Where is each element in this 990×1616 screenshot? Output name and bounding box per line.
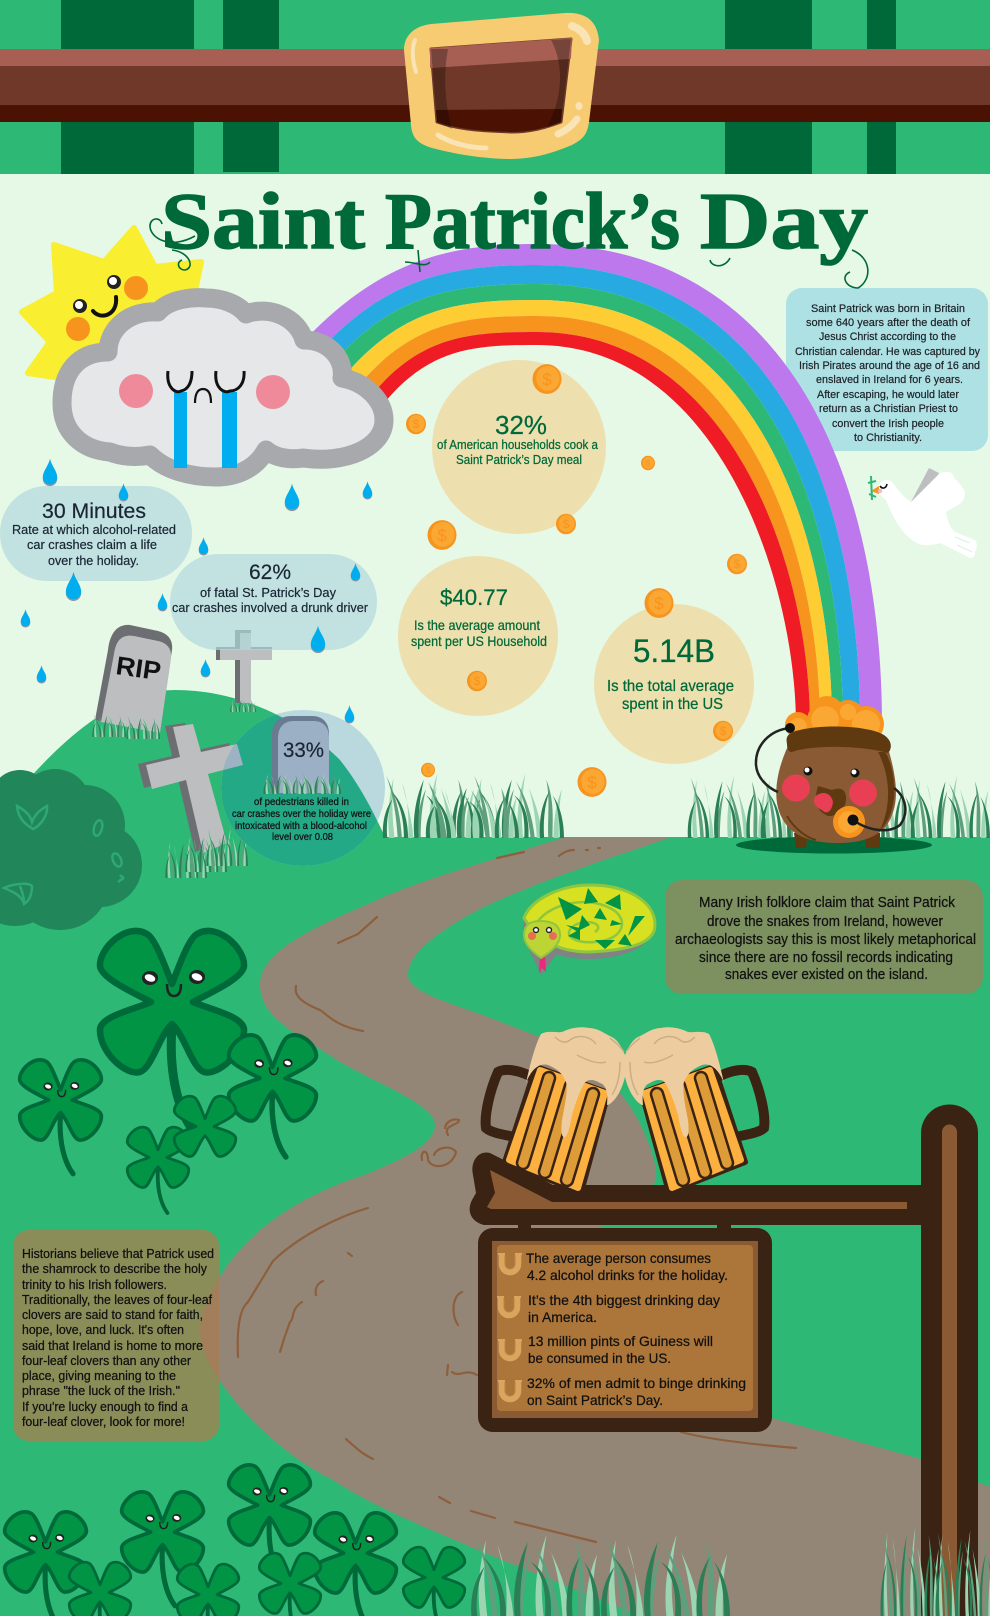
tuft: meadow grass right [688, 776, 990, 838]
gold coins: $ [563, 517, 570, 531]
bubble: 30 Minutes: Rate at which alcohol-related [12, 522, 176, 537]
gold coins over meadow [421, 763, 606, 797]
panel: shamrock history note: Traditionally, the leaves of four-leaf [22, 1293, 213, 1307]
stat circle: 32% households: Saint Patrick’s Day meal [456, 452, 582, 467]
icon: horseshoe 1 [498, 1253, 522, 1272]
stat circle: 32% households: 32% [495, 410, 547, 440]
panel: snake folklore note: since there are no fossil records indicating [699, 949, 953, 966]
text: Saint Patrick biography: return as a Christian Priest to [819, 403, 958, 415]
title: Day [700, 178, 868, 266]
bubble: 30 Minutes: car crashes claim a life [27, 537, 157, 552]
panel: snake folklore note: snakes ever existed on the island. [725, 966, 928, 983]
gold coins: $ [413, 417, 420, 431]
fact 1 [526, 1250, 728, 1283]
icon: horseshoe 3 [498, 1339, 522, 1358]
text: Saint Patrick biography: Saint Patrick was born in Britain [811, 303, 965, 315]
tuft: foreground grass right [881, 1527, 990, 1616]
gold coins: $ [734, 557, 741, 571]
fact 2 [528, 1292, 720, 1325]
bubble: 30 Minutes: over the holiday. [48, 553, 139, 568]
panel: shamrock history note: the shamrock to describe the holy [22, 1262, 208, 1276]
text: Saint Patrick biography: After escaping, he would later [817, 389, 959, 401]
gold coins [406, 364, 747, 741]
text: Saint Patrick biography: some 640 years after the death of [806, 317, 971, 329]
right mug [624, 1027, 764, 1192]
text: Saint Patrick biography: enslaved in Ireland for 6 years. [816, 374, 963, 386]
stat circle: 33% pedestrians: 33% [283, 739, 324, 762]
panel: snake folklore note: Many Irish folklore claim that Saint Patrick [699, 894, 955, 911]
fact 3 [528, 1333, 713, 1366]
tuft: grass at large cross [165, 828, 248, 878]
stat circle: $40.77 per household [398, 556, 558, 716]
tombstone: RIP: RIP [114, 650, 163, 686]
panel: snake folklore note [665, 880, 983, 994]
fact 3: be consumed in the US. [528, 1350, 671, 1366]
gold coins: $ [646, 459, 651, 468]
gold coins: $ [437, 526, 447, 545]
title [150, 178, 868, 288]
panel: shamrock history note: If you're lucky enough to find a [22, 1400, 188, 1414]
stat circle: 33% pedestrians: intoxicated with a blood-alcohol [235, 820, 367, 832]
beer mugs toasting [486, 1027, 764, 1192]
fact 4: 32% of men admit to binge drinking [527, 1375, 746, 1391]
gold coins: $ [542, 370, 552, 389]
signpost [470, 1104, 978, 1616]
icon: white dove with branch [868, 468, 977, 558]
rainbow [300, 244, 882, 725]
fact 1: 4.2 alcohol drinks for the holiday. [527, 1267, 728, 1283]
text: Saint Patrick biography: to Christianity. [854, 432, 922, 444]
large leaning cross [138, 723, 243, 853]
panel: shamrock history note: four-leaf clovers than any other [22, 1354, 191, 1368]
text: Saint Patrick biography: Christian calendar. He was captured by [795, 346, 980, 358]
tuft: foreground grass centre [471, 1535, 730, 1616]
stat circle: 5.14B total: spent in the US [622, 696, 723, 713]
pot of gold character [736, 696, 932, 854]
gold coins: $ [654, 594, 664, 613]
icon: gold belt buckle [404, 13, 599, 159]
text: Saint Patrick biography: Jesus Christ according to the [819, 331, 956, 343]
header: plaid band with belt and buckle [0, 0, 990, 174]
stat circle: $40.77 per household: spent per US Household [411, 633, 547, 649]
shamrock row at bottom [5, 1465, 465, 1616]
panel: snake folklore note: drove the snakes from Ireland, however [707, 913, 943, 930]
stat circle: 5.14B total [594, 604, 754, 764]
stat circle: 5.14B total: Is the total average [607, 678, 734, 695]
panel: shamrock history note: said that Ireland is home to more [22, 1339, 203, 1353]
panel: shamrock history note: four-leaf clover, look for more! [22, 1415, 185, 1429]
road [200, 837, 990, 1616]
bubble: 30 Minutes: 30 Minutes [42, 500, 146, 523]
icon: horseshoe 2 [497, 1296, 521, 1315]
stat circle: 32% households: of American households cook a [437, 437, 599, 452]
gold coins: $ [720, 724, 727, 738]
stat circle: 33% pedestrians: car crashes over the holiday were [232, 808, 371, 820]
fact 2: in America. [528, 1309, 597, 1325]
stat circle: 5.14B total: 5.14B [633, 633, 715, 669]
stat circle: 33% pedestrians: level over 0.08 [272, 831, 333, 843]
panel: shamrock history note: place, giving meaning to the [22, 1369, 176, 1383]
panel: Saint Patrick background box [786, 288, 988, 451]
bubble: 62% fatal crashes: 62% [249, 561, 291, 584]
bubble: 62% fatal crashes [170, 554, 377, 650]
gold coins: $ [474, 674, 481, 688]
icon: coiled snake [522, 885, 655, 975]
shamrock cluster [20, 931, 316, 1213]
text: Saint Patrick biography [795, 303, 980, 444]
fact 1: The average person consumes [526, 1250, 711, 1266]
stat circle: $40.77 per household: $40.77 [440, 585, 508, 610]
panel: shamrock history note: phrase "the luck of the Irish." [22, 1384, 180, 1398]
text: Saint Patrick biography: convert the Irish people [832, 418, 944, 430]
stat circle: 33% pedestrians [221, 710, 385, 866]
panel: shamrock history note: Historians believe that Patrick used [22, 1247, 214, 1261]
stat circle: 32% households [432, 360, 606, 534]
panel: shamrock history note: clovers are said to stand for faith, [22, 1308, 203, 1322]
ground and hill [0, 690, 990, 1616]
bubble: 62% fatal crashes: of fatal St. Patrick’s Day [200, 585, 336, 600]
fact 2: It’s the 4th biggest drinking day [528, 1292, 720, 1308]
bubble: 62% fatal crashes: car crashes involved a drunk driver [172, 600, 369, 615]
bush [0, 769, 142, 930]
small cross [216, 630, 272, 703]
tuft: meadow grass left [383, 774, 564, 838]
tombstone: RIP [95, 625, 172, 733]
raindrops [21, 459, 372, 723]
fact 3: 13 million pints of Guiness will [528, 1333, 713, 1349]
stat circle: 33% pedestrians: of pedestrians killed in [254, 796, 349, 808]
title: Saint [161, 178, 365, 266]
gold coins over meadow: $ [587, 773, 597, 792]
stat circle: $40.77 per household: Is the average amount [414, 617, 540, 633]
panel: shamrock history note [13, 1230, 219, 1441]
fact 4: on Saint Patrick’s Day. [527, 1392, 663, 1408]
icon: horseshoe 4 [498, 1380, 522, 1399]
gold coins over meadow: $ [426, 766, 431, 775]
bubble: 30 Minutes [0, 486, 192, 581]
fact 4 [527, 1375, 746, 1408]
title: Patrick’s [385, 178, 680, 266]
panel: shamrock history note: hope, love, and luck. It's often [22, 1323, 184, 1337]
left mug [486, 1027, 626, 1192]
panel: shamrock history note: trinity to his Irish followers. [22, 1278, 167, 1292]
sign board with drinking facts [478, 1228, 772, 1432]
tuft: grass at RIP stone [92, 713, 160, 739]
text: Saint Patrick biography: Irish Pirates around the age of 16 and [799, 360, 980, 372]
cloud with crying face [62, 298, 384, 477]
icon: smiling sun [22, 228, 201, 390]
tuft: grass at small cross [230, 699, 256, 712]
